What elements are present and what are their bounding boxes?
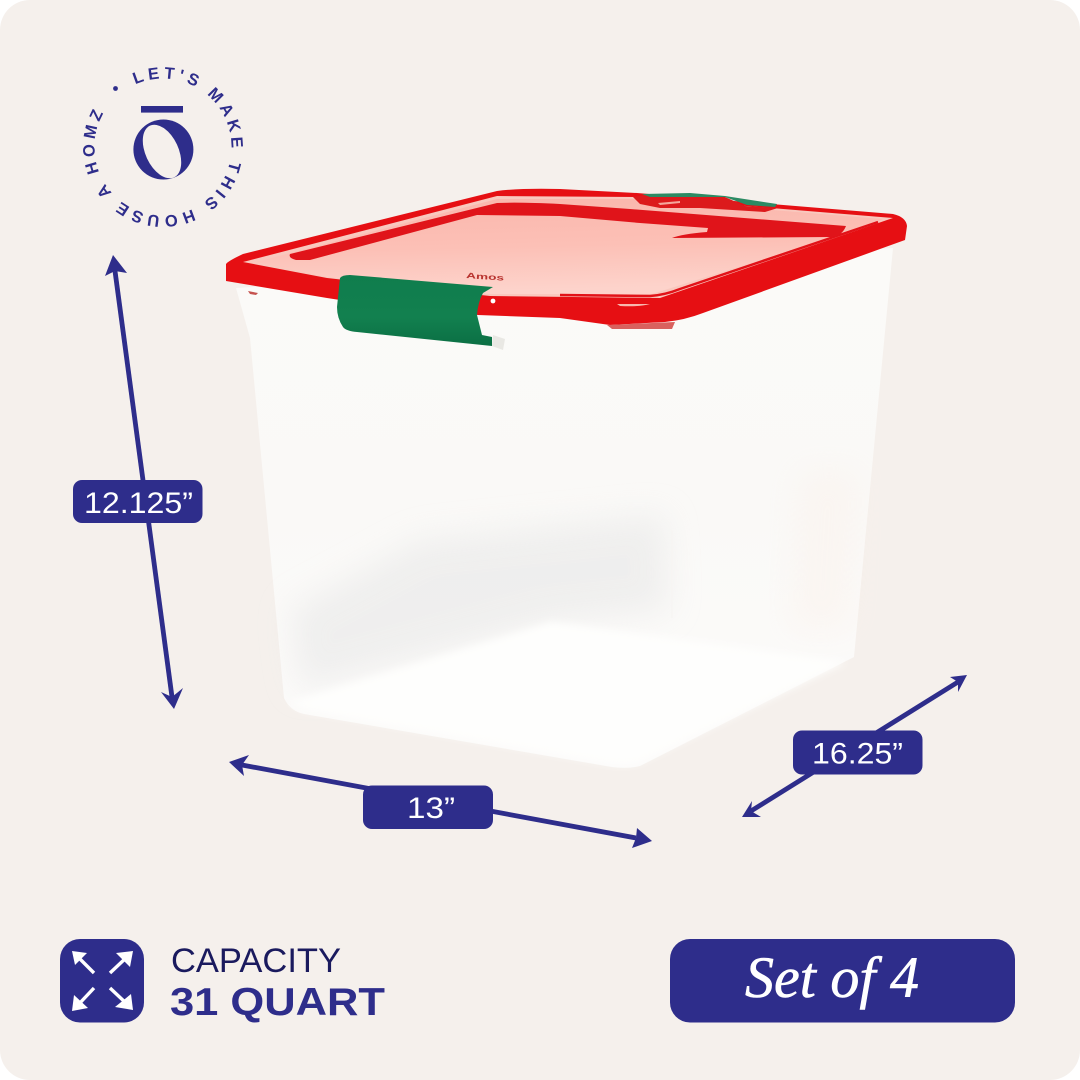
latch tab bbox=[492, 335, 505, 350]
set of 4 badge: Set of 4 bbox=[745, 945, 919, 1010]
depth dimension arrow bbox=[742, 675, 967, 817]
capacity caption: CAPACITY bbox=[171, 942, 341, 980]
height arrow head top bbox=[105, 255, 127, 276]
width arrow shaft bbox=[242, 765, 636, 838]
lid front inner line bbox=[560, 222, 878, 296]
separator dot bbox=[113, 86, 118, 91]
depth arrow head top bbox=[950, 675, 967, 692]
lid inner red channel bbox=[290, 203, 846, 260]
width dimension arrow bbox=[229, 755, 652, 848]
interior shadow bbox=[290, 470, 860, 690]
height arrow head bottom bbox=[161, 688, 183, 709]
depth arrow head bottom bbox=[742, 801, 761, 817]
set of 4 badge bbox=[670, 939, 1015, 1022]
bin floor bbox=[290, 622, 846, 765]
height dimension arrow bbox=[73, 255, 202, 709]
width arrow head right bbox=[632, 828, 652, 848]
circular slogan text: LET'S MAKE THIS HOUSE A HOMZ bbox=[83, 67, 243, 227]
capacity block bbox=[60, 939, 385, 1024]
interior corner edge bbox=[671, 530, 673, 618]
height label: 12.125” bbox=[84, 487, 193, 520]
lid outer rim bbox=[226, 189, 907, 325]
height label bbox=[73, 480, 202, 523]
icon: expand arrows bbox=[60, 939, 144, 1022]
left foot bbox=[248, 291, 258, 295]
depth arrow shaft bbox=[751, 682, 958, 811]
depth label bbox=[793, 730, 922, 774]
lid highlight strip bbox=[243, 196, 893, 298]
width label: 13” bbox=[407, 792, 455, 825]
lid embossed logo: Amos bbox=[466, 271, 505, 283]
brand logo badge bbox=[83, 67, 243, 227]
capacity value: 31 QUART bbox=[170, 981, 385, 1024]
lid foot bbox=[607, 322, 675, 329]
width label bbox=[363, 786, 493, 829]
lid handle bbox=[633, 193, 778, 212]
logo macron bar bbox=[141, 106, 183, 113]
green latch clasp bbox=[337, 275, 493, 346]
product: storage bin bbox=[226, 189, 907, 768]
lid top panel bbox=[256, 199, 883, 294]
bin body bbox=[236, 248, 893, 768]
width arrow head left bbox=[229, 755, 249, 776]
lid front rim highlight bbox=[617, 304, 650, 306]
latch rivet bbox=[491, 299, 495, 303]
logo letter o bbox=[133, 119, 193, 184]
height arrow shaft bbox=[115, 271, 172, 697]
depth label: 16.25” bbox=[812, 738, 903, 770]
